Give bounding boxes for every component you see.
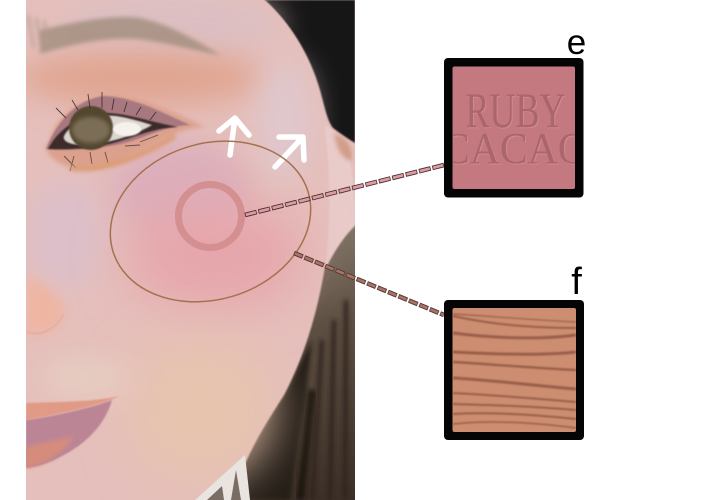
shirt stripes [195, 455, 250, 500]
blush highlight ring [178, 184, 242, 248]
connector: ellipse to swatch f [294, 253, 444, 315]
eyebrow [28, 15, 222, 56]
swatch f: bronze powder pan [444, 300, 584, 440]
arrow: diagonal [275, 137, 304, 167]
connector: ring to swatch e [245, 165, 444, 215]
embossed text: CACAO [443, 125, 589, 174]
eye [46, 92, 205, 171]
arrow: upward [219, 118, 249, 155]
nose [26, 275, 66, 335]
label e: e [567, 23, 586, 62]
skin tones [15, 0, 310, 480]
ear [325, 126, 355, 266]
face skin [240, 0, 330, 464]
hair lower right [235, 225, 355, 500]
embossed text: RUBY [466, 82, 566, 138]
embossed text: RUBY [466, 83, 566, 139]
photo: close-up of a face with blush [15, 0, 355, 500]
swatch e: pink blush pan [442, 58, 589, 198]
label f: f [571, 261, 582, 303]
blush zone ellipse [90, 117, 331, 326]
wave lines [453, 314, 576, 428]
hair top right [263, 0, 355, 143]
embossed text: CACAO [442, 124, 588, 173]
embossed text [453, 94, 575, 164]
lips [26, 396, 120, 468]
